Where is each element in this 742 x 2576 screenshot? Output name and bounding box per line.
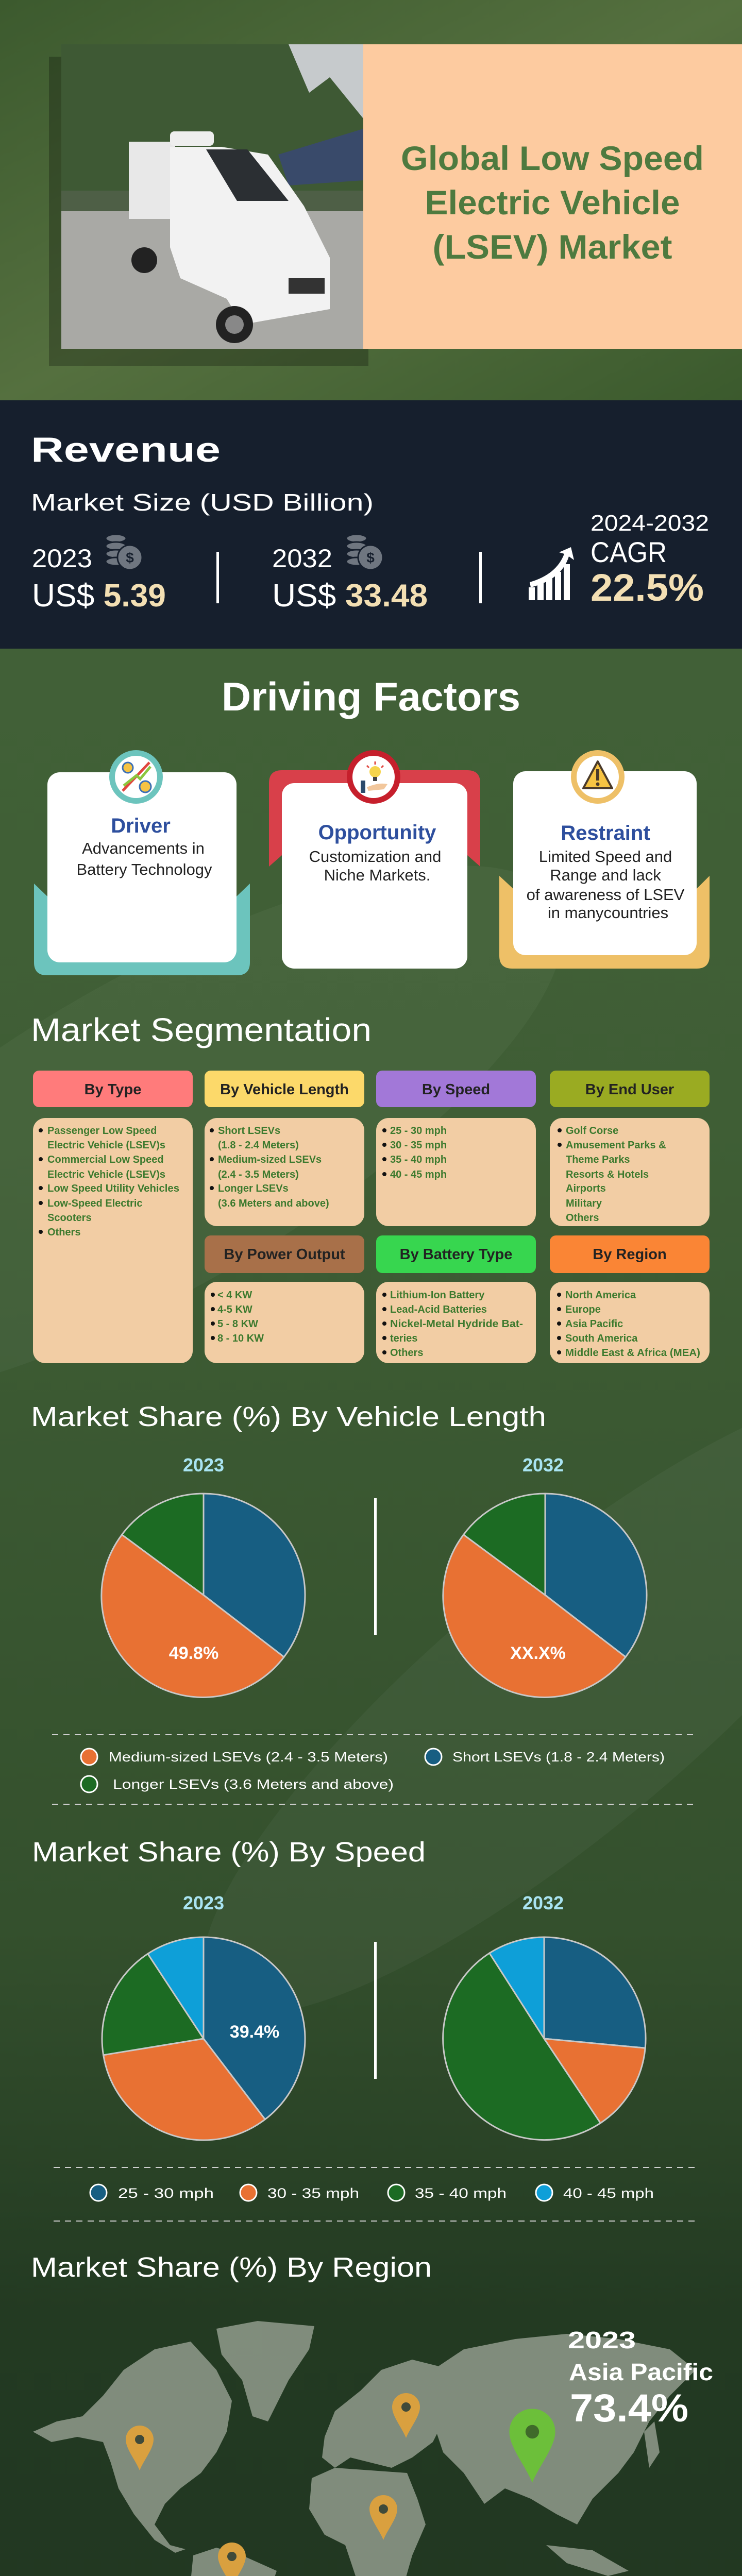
segment: by battery type: By Battery Type <box>400 1246 512 1263</box>
card: driver: Driver <box>111 815 171 837</box>
title panel: (LSEV) Market <box>433 228 672 266</box>
card: opportunity: Opportunity <box>318 821 436 844</box>
segment: by speed <box>376 1071 536 1226</box>
card: restraint: Range and lack <box>550 866 661 884</box>
segment: by power output: 4-5 KW <box>217 1304 252 1315</box>
revenue band <box>0 400 742 649</box>
icon: growth chart <box>529 547 574 600</box>
icon: driver <box>109 750 163 804</box>
stat 2032 <box>272 534 428 614</box>
card: restraint: Limited Speed and <box>539 848 672 866</box>
segment: by battery type: Lithium-Ion Battery <box>390 1290 485 1301</box>
title panel: Global Low Speed <box>401 139 704 177</box>
legend: vehicle length <box>52 1735 695 1804</box>
stat 2023 <box>32 534 166 614</box>
segment: by power output <box>205 1235 364 1363</box>
segment: by type: Low-Speed Electric <box>47 1198 142 1209</box>
card: opportunity <box>269 750 480 969</box>
card: restraint <box>499 750 710 969</box>
legend: vehicle length: Short LSEVs (1.8 - 2.4 Meters) <box>452 1749 665 1765</box>
segment: by end user: Amusement Parks & <box>566 1140 666 1151</box>
segment: by region: By Region <box>593 1246 667 1263</box>
CAGR: CAGR <box>591 536 667 568</box>
CAGR <box>591 511 709 609</box>
segment: by region: South America <box>565 1333 638 1344</box>
callout: asia pacific share: Asia Pacific <box>569 2359 713 2385</box>
pie chart: speed 2032: 2032 <box>522 1892 564 1913</box>
segment: by vehicle length: Medium-sized LSEVs <box>218 1154 322 1165</box>
CAGR: 2024-2032 <box>591 511 709 536</box>
legend: speed: 40 - 45 mph <box>563 2185 654 2201</box>
segment: by vehicle length: (1.8 - 2.4 Meters) <box>218 1140 299 1151</box>
pie chart: vehicle length 2032 <box>443 1454 647 1697</box>
segment: by end user: Military <box>566 1198 602 1209</box>
pie chart: vehicle length 2032: XX.X% <box>510 1643 566 1663</box>
segment: by vehicle length: By Vehicle Length <box>220 1081 349 1098</box>
segment: by battery type: Nickel-Metal Hydride Bat- <box>390 1318 523 1330</box>
segment: by battery type <box>376 1235 536 1363</box>
card: driver <box>34 750 250 975</box>
pie chart: vehicle length 2023: 2023 <box>183 1454 224 1476</box>
segment: by speed: 25 - 30 mph <box>390 1125 447 1137</box>
segment: by speed: 40 - 45 mph <box>390 1169 447 1180</box>
pie chart: speed 2023: 2023 <box>183 1892 224 1913</box>
segment: by power output: By Power Output <box>224 1246 345 1263</box>
segment: by battery type: Lead-Acid Batteries <box>390 1304 487 1315</box>
segment: by end user: Golf Corse <box>566 1125 618 1137</box>
segment: by vehicle length <box>205 1071 364 1226</box>
legend: speed: 35 - 40 mph <box>415 2185 507 2201</box>
segment: by vehicle length: (2.4 - 3.5 Meters) <box>218 1169 299 1180</box>
segment: by type: Electric Vehicle (LSEV)s <box>47 1169 165 1180</box>
card: driver: Advancements in <box>82 839 205 857</box>
heading: market segmentation: Market Segmentation <box>31 1011 372 1048</box>
card: restraint: Restraint <box>561 822 650 844</box>
stat 2032: US$ 33.48 <box>272 578 428 614</box>
callout: asia pacific share: 73.4% <box>570 2386 688 2430</box>
stat 2032: $ <box>366 550 375 566</box>
heading: market share by region: Market Share (%) By Region <box>31 2252 432 2283</box>
segment: by type: Commercial Low Speed <box>47 1154 164 1165</box>
segment: by type <box>33 1071 193 1363</box>
heading: market share by vehicle length: Market Share (%) By Vehicle Length <box>31 1401 546 1432</box>
legend: speed <box>54 2167 698 2221</box>
segment: by region: Middle East & Africa (MEA) <box>565 1347 700 1359</box>
stat 2023: US$ 5.39 <box>32 578 166 614</box>
card: driver: Battery Technology <box>76 860 212 878</box>
icon: warning <box>571 750 625 804</box>
segment: by region: Europe <box>565 1304 601 1315</box>
card: opportunity: Customization and <box>309 848 441 866</box>
segment: by type: Low Speed Utility Vehicles <box>47 1183 179 1194</box>
segment: by speed: 35 - 40 mph <box>390 1154 447 1165</box>
segment: by power output: 8 - 10 KW <box>217 1333 264 1344</box>
stat 2032: 2032 <box>272 544 332 573</box>
segment: by speed: By Speed <box>422 1081 490 1098</box>
segment: by type: Electric Vehicle (LSEV)s <box>47 1140 165 1151</box>
segment: by region <box>550 1235 710 1363</box>
stat 2023: 2023 <box>32 544 92 573</box>
legend: speed: 25 - 30 mph <box>118 2185 214 2201</box>
pie chart: speed 2023: 39.4% <box>230 2022 279 2042</box>
legend: vehicle length: Longer LSEVs (3.6 Meters and above) <box>113 1776 394 1792</box>
segment: by battery type: teries <box>390 1333 417 1344</box>
pie chart: vehicle length 2032: 2032 <box>522 1454 564 1476</box>
card: opportunity: Niche Markets. <box>324 866 430 884</box>
map pins <box>126 2393 555 2576</box>
pie chart: vehicle length 2023: 49.8% <box>169 1643 218 1663</box>
callout: asia pacific share <box>568 2327 713 2430</box>
photo: electric vehicle <box>61 44 363 349</box>
segment: by end user: By End User <box>585 1081 674 1098</box>
stat 2023: $ <box>126 550 134 566</box>
title panel: Electric Vehicle <box>425 183 680 222</box>
pie chart: speed 2032 <box>443 1892 646 2140</box>
header section <box>0 0 742 400</box>
segment: by type: Scooters <box>47 1212 92 1224</box>
world map <box>33 2321 696 2576</box>
card: restraint: in manycountries <box>548 904 668 922</box>
heading: market share by speed: Market Share (%) By Speed <box>32 1837 426 1868</box>
segment: by region: North America <box>565 1290 636 1301</box>
pie chart: vehicle length 2023 <box>102 1454 305 1697</box>
segment: by region: Asia Pacific <box>565 1318 623 1330</box>
segment: by power output: 5 - 8 KW <box>217 1318 258 1330</box>
callout: asia pacific share: 2023 <box>568 2327 636 2353</box>
segment: by power output: < 4 KW <box>217 1290 252 1301</box>
segment: by vehicle length: Longer LSEVs <box>218 1183 289 1194</box>
heading: driving factors: Driving Factors <box>222 674 520 719</box>
segment: by speed: 30 - 35 mph <box>390 1140 447 1151</box>
segment: by vehicle length: Short LSEVs <box>218 1125 280 1137</box>
card: restraint: of awareness of LSEV <box>527 886 685 904</box>
segment: by vehicle length: (3.6 Meters and above) <box>218 1198 329 1209</box>
segment: by battery type: Others <box>390 1347 423 1359</box>
market size label: Market Size (USD Billion) <box>31 489 374 516</box>
segment: by end user: Theme Parks <box>566 1154 630 1165</box>
legend: speed: 30 - 35 mph <box>267 2185 359 2201</box>
segment: by end user: Others <box>566 1212 599 1224</box>
segment: by end user <box>550 1071 710 1226</box>
segment: by end user: Resorts & Hotels <box>566 1169 649 1180</box>
CAGR: 22.5% <box>591 566 704 609</box>
segment: by type: Others <box>47 1227 80 1238</box>
revenue heading: Revenue <box>31 430 221 469</box>
icon: opportunity <box>347 750 400 804</box>
segment: by end user: Airports <box>566 1183 606 1194</box>
legend: vehicle length: Medium-sized LSEVs (2.4 - 3.5 Meters) <box>109 1749 388 1765</box>
segment: by type: By Type <box>85 1081 141 1098</box>
pie chart: speed 2023 <box>102 1892 305 2140</box>
segment: by type: Passenger Low Speed <box>47 1125 157 1137</box>
title panel <box>363 44 742 349</box>
